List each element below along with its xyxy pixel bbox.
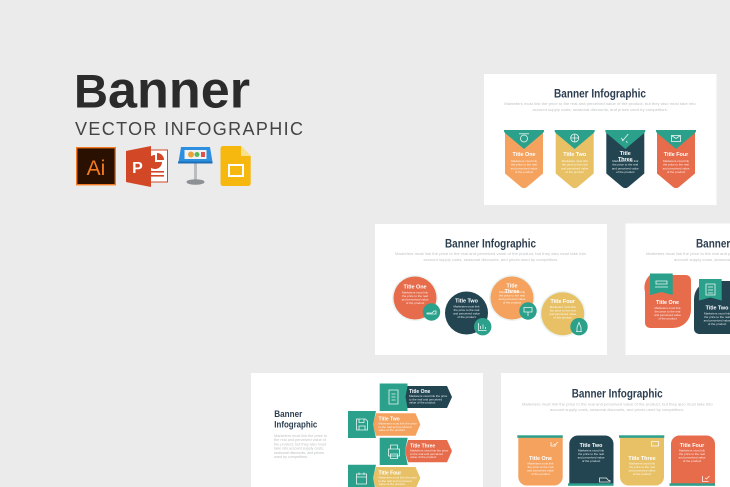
circle: Title Three: of the product <box>503 300 521 304</box>
icon: PowerPoint: P <box>132 160 143 177</box>
card: Title Four <box>670 436 715 486</box>
card: Title One <box>644 274 691 328</box>
description: take into account supply costs, <box>274 446 324 451</box>
row: Title Four: to the real and perceived <box>378 479 412 483</box>
description: the product, but they also must <box>274 441 327 446</box>
circle: Title Four: and perceived value <box>549 312 576 316</box>
banner: Title Four: Title Four <box>664 152 689 158</box>
card: Title One: and perceived value <box>654 313 681 317</box>
heading: Banner Infographic <box>554 88 647 100</box>
panel: circles slide <box>375 224 607 355</box>
card: Title Two <box>568 436 614 486</box>
icon: Adobe Illustrator <box>77 148 115 185</box>
card: Title Two: Title Two <box>580 443 603 449</box>
row: Title Two: Marketers must link the price <box>378 422 417 426</box>
row: Title Two: value of the product <box>378 428 405 432</box>
circle: Title One: Title One <box>404 284 426 290</box>
banner: Title Two: Title Two <box>563 152 587 158</box>
card: Title Four: of the product <box>683 459 701 463</box>
heading: Banner Infographic <box>445 238 537 250</box>
banner: Title One: the price to the real <box>511 163 537 167</box>
circle: Title One: and perceived value <box>402 298 429 302</box>
card: Title Three: of the product <box>633 472 651 476</box>
circle: Title Two: Marketers must link <box>453 304 480 308</box>
description <box>504 101 696 112</box>
row: Title Four: Marketers must link the price <box>378 476 417 480</box>
card: Title Four: Marketers must link <box>679 448 705 452</box>
circle: Title Three: and perceived value <box>499 297 526 301</box>
card: Title Two: Marketers must link <box>704 312 730 316</box>
row: Title One: Marketers must link the price <box>409 394 448 398</box>
circle: Title Three: Three <box>505 289 519 295</box>
row: Title Four: Title Four <box>378 470 401 476</box>
row: Title Four <box>348 465 420 487</box>
circle: Title Two: Title Two <box>455 298 479 304</box>
circle: Title Two: the price to the real <box>454 308 480 312</box>
circle: Title Four: of the product <box>554 316 572 320</box>
row: Title One: value of the product <box>409 401 436 405</box>
card: Title Four: the price to the real <box>679 452 705 456</box>
banner: Title Four: the price to the real <box>663 163 689 167</box>
description: account supply costs, seasonal discounts, and prices used by competitors. <box>424 257 558 262</box>
circle: Title Four: the price to the real <box>550 308 576 312</box>
card: Title One: Title One <box>656 300 679 306</box>
description: Marketers must link the price to the real and perceived value of the product, but they also must take into <box>522 402 713 406</box>
card: Title Three: Title Three <box>628 456 656 462</box>
card: Title Four: and perceived value <box>679 456 706 460</box>
circle: Title One: of the product <box>406 301 424 305</box>
panel: tabbed cards slide <box>626 224 730 355</box>
banner: Title Three <box>605 130 645 188</box>
row: Title Two <box>348 411 420 438</box>
circle: Title One <box>392 275 440 321</box>
row: Title Three <box>380 438 452 465</box>
icon: PowerPoint <box>126 146 168 187</box>
panel: arrow tabs slide <box>251 373 483 487</box>
circle: Title Four <box>540 291 588 337</box>
banner: Title Two <box>555 130 595 188</box>
card: Title Two <box>694 279 730 334</box>
circle: Title Four: Title Four <box>550 299 576 305</box>
banner: Title Three: and perceived value <box>612 166 639 170</box>
card: Title One: Title One <box>529 456 552 462</box>
card: Title Two: Marketers must link <box>578 448 604 452</box>
banner: Title One: Title One <box>513 152 535 158</box>
icon: Adobe Illustrator: Ai <box>87 157 105 180</box>
description: the real and perceived value of <box>274 437 327 442</box>
subheading: Vector Infographic: VECTOR INFOGRAPHIC <box>75 119 303 139</box>
circle: Title Three: Title <box>507 284 517 290</box>
card: Title One: the price to the real <box>528 465 554 469</box>
row: Title One <box>380 384 452 411</box>
description <box>274 433 327 459</box>
card: Title Four: Title Four <box>680 443 705 449</box>
description <box>395 251 586 262</box>
card: Title Three: the price to the real <box>629 465 655 469</box>
icon: Google Slides <box>220 146 251 186</box>
row: Title Three: value of the product <box>410 455 437 459</box>
description <box>646 251 730 262</box>
banner: Title One: Marketers must link <box>511 159 537 163</box>
row: Title Three: to the real and perceived <box>410 452 443 456</box>
banner: Title One <box>504 130 544 188</box>
card: Title Two: the price to the real <box>704 315 730 319</box>
card: Title One <box>517 435 563 486</box>
banner: Title Four: of the product <box>667 170 685 174</box>
banner: Title Two: the price to the real <box>562 163 588 167</box>
banner: Title Three: Title <box>620 151 631 157</box>
card: Title Three: Marketers must link <box>629 462 655 466</box>
description: Marketers must link the price to the real and perceived value of the product, but they also must take into <box>504 101 696 106</box>
banner: Title Four: and perceived value <box>663 166 690 170</box>
circle: Title Three: Marketers must link <box>499 290 525 294</box>
heading: Banner Infographic <box>572 389 663 401</box>
heading: Banner <box>274 409 303 420</box>
banner: Title One: and perceived value <box>511 166 538 170</box>
card: Title One: the price to the real <box>655 310 681 314</box>
banner: Title Three: Three <box>618 157 633 163</box>
banner: Title Two: and perceived value <box>561 166 588 170</box>
heading: Infographic <box>274 420 317 431</box>
card: Title One: and perceived value <box>527 468 554 472</box>
panel: ribbon banners slide <box>484 74 716 205</box>
card: Title Two: Title Two <box>706 306 729 312</box>
icon: Keynote <box>178 147 212 185</box>
circle: Title Two: and perceived value <box>453 312 480 316</box>
card: Title Two: of the product <box>582 459 600 463</box>
card: Title Two: and perceived value <box>578 456 605 460</box>
card: Title One: of the product <box>531 472 550 476</box>
card: Title Two: the price to the real <box>578 452 604 456</box>
card: Title Two: and perceived value <box>704 318 730 322</box>
banner: Title Two: Marketers must link <box>562 159 588 163</box>
heading <box>274 409 317 431</box>
row: Title One: to the real and perceived <box>409 397 442 401</box>
banner: Title Two: of the product <box>566 170 584 174</box>
card: Title One: Marketers must link <box>527 462 554 466</box>
heading: Banner: Banner <box>74 62 250 120</box>
description <box>522 402 713 412</box>
description: Marketers must link the price to <box>274 433 327 438</box>
description: account supply costs, seasonal discounts, and prices used by competitors. <box>532 107 668 112</box>
circle: Title One: the price to the real <box>402 294 428 298</box>
card: Title Three <box>619 435 664 486</box>
row: Title Three: Title Three <box>410 444 435 450</box>
row: Title Two: to the real and perceived <box>378 425 412 429</box>
banner: Title Four: Marketers must link <box>663 159 689 163</box>
panel: rounded cards slide <box>501 373 730 487</box>
description: used by competitors. <box>274 454 308 459</box>
row: Title Three: Marketers must link the price <box>410 448 449 452</box>
card: Title Three: and perceived value <box>629 468 656 472</box>
row: Title One: Title One <box>409 389 431 395</box>
card: Title One: Marketers must link <box>654 306 681 310</box>
banner: Title Three: the price to the real <box>612 163 638 167</box>
circle: Title Three <box>489 275 537 321</box>
description: Marketers must link the price to the real and perceived value of the product, but they also must take into <box>395 251 586 256</box>
card: Title One: of the product <box>658 316 677 320</box>
row: Title Four: value of the product <box>378 482 405 486</box>
banner: Title Three: Marketers must link <box>612 159 639 163</box>
card: Title Two: of the product <box>708 322 726 326</box>
banner: Title Three: of the product <box>616 170 635 174</box>
banner: Title One: of the product <box>515 170 533 174</box>
circle: Title One: Marketers must link <box>402 290 428 294</box>
banner: Title Four <box>656 130 696 188</box>
circle: Title Two <box>445 292 491 335</box>
description: seasonal discounts, and prices <box>274 450 324 455</box>
circle: Title Two: of the product <box>457 315 476 319</box>
circle: Title Four: Marketers must link <box>550 305 576 309</box>
circle: Title Three: the price to the real <box>499 294 525 298</box>
description: account supply costs, seasonal discounts, and prices used by competitors. <box>550 407 684 412</box>
row: Title Two: Title Two <box>378 416 400 422</box>
